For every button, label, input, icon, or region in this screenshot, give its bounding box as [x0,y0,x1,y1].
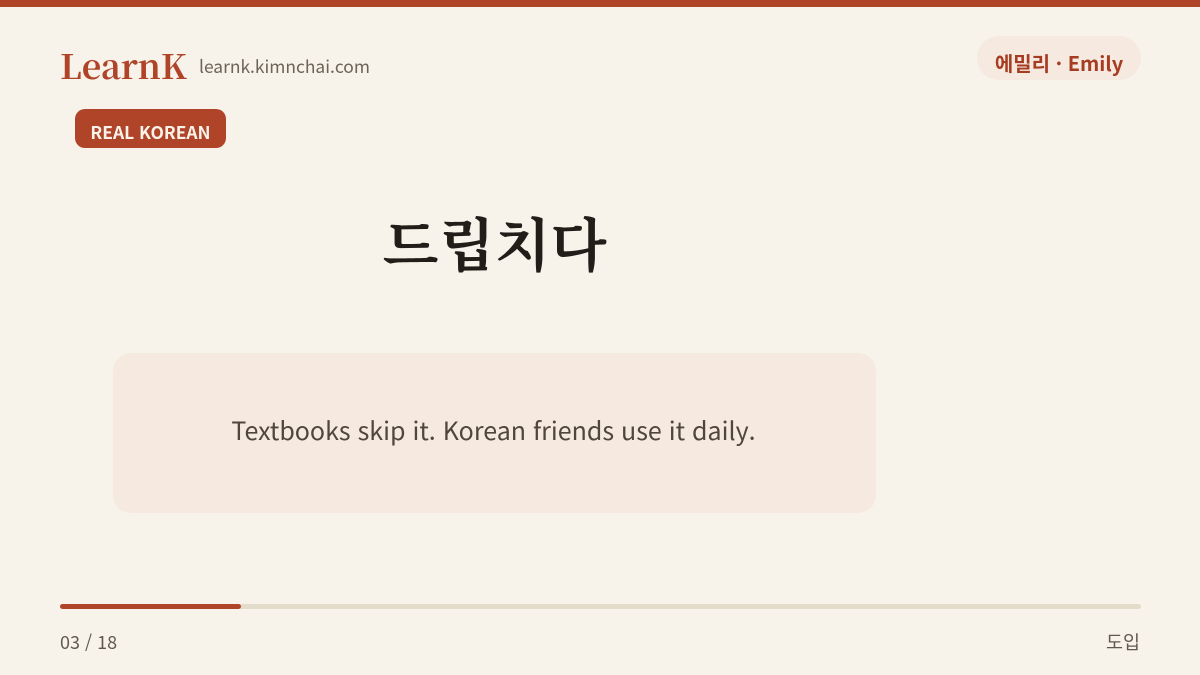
presenter badge [977,36,1141,80]
progress bar track [60,604,1141,609]
section label: 도입 [1106,629,1140,655]
category tag: REAL KOREAN [90,120,211,145]
explanation text: Textbooks skip it. Korean friends use it daily. [231,412,756,448]
progress bar fill [60,604,241,609]
main word heading: 드립치다 [382,199,607,283]
brand logo: LearnK [60,40,187,89]
panel: explanation [113,353,876,513]
presenter badge: 에밀리 · Emily [995,48,1123,77]
top accent bar [0,0,1200,7]
site url: learnk.kimnchai.com [199,54,370,79]
page counter: 03 / 18 [60,629,117,655]
category tag [75,109,226,148]
